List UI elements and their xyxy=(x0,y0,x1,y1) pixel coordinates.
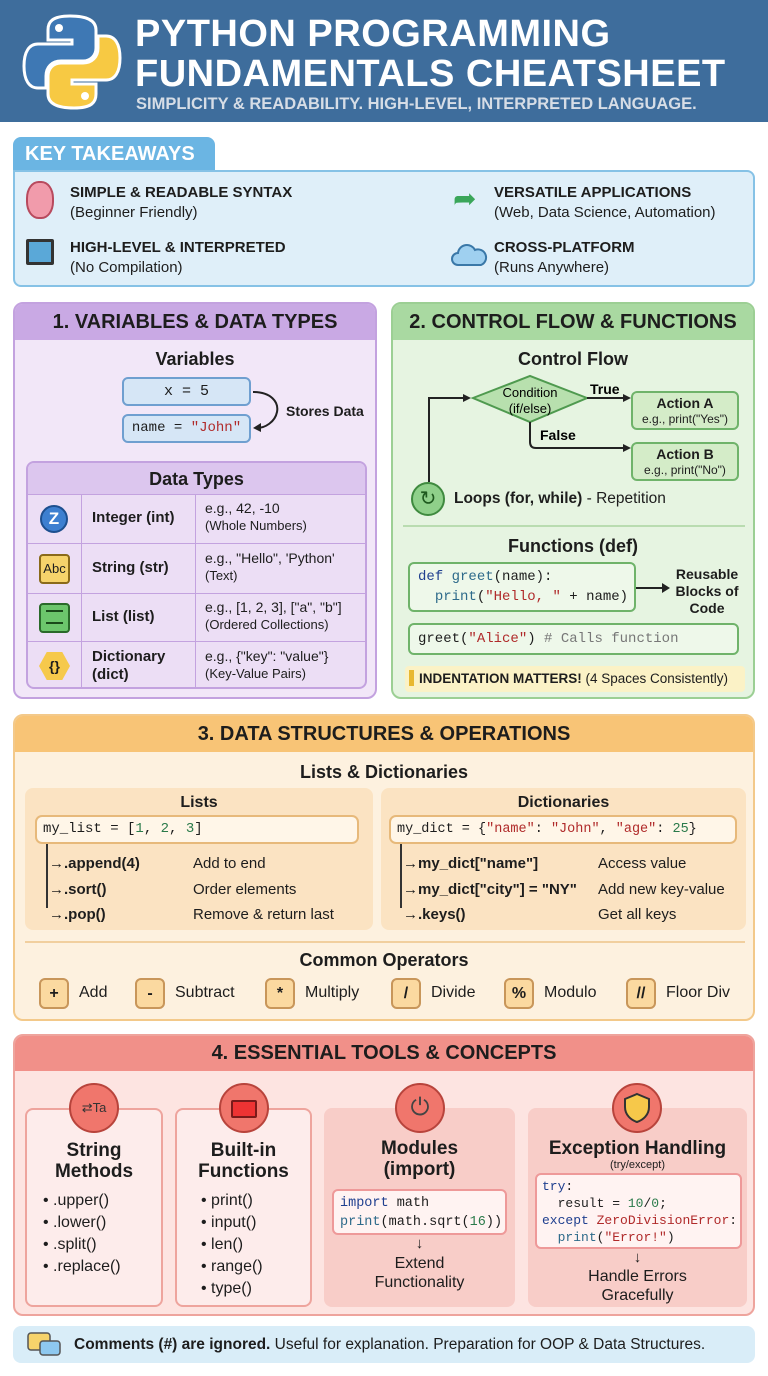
icon: plug: ⏻ xyxy=(410,1094,429,1121)
text: cross platform: (Runs Anywhere) xyxy=(494,259,609,276)
operators row: Modulo xyxy=(544,984,596,1001)
subheading: variables: Variables xyxy=(155,349,235,369)
text: cross platform: CROSS-PLATFORM xyxy=(494,239,635,256)
code: name = John: name = "John" xyxy=(132,420,241,436)
panel: key takeaways xyxy=(13,137,755,287)
title: PYTHON PROGRAMMING xyxy=(135,13,611,55)
code: x = 5 xyxy=(122,377,251,406)
card: string methods: String xyxy=(67,1140,121,1161)
icon: string methods xyxy=(69,1083,119,1133)
table: data types xyxy=(26,461,367,689)
card: modules: ↓ xyxy=(416,1235,423,1252)
operators row: + xyxy=(49,985,59,1002)
icon: speech bubbles xyxy=(27,1332,61,1356)
flowchart: control flow: False xyxy=(540,427,576,443)
card: string methods: • .upper() xyxy=(43,1192,109,1209)
box: action A: Action A xyxy=(656,395,714,411)
subpanel: lists xyxy=(25,788,373,930)
subpanel: lists: Lists xyxy=(180,794,218,811)
flowchart: control flow: True xyxy=(590,381,620,397)
row: integer: Z xyxy=(49,509,59,528)
card: exception handling: Gracefully xyxy=(601,1287,674,1304)
box: action B xyxy=(631,442,739,481)
row: dictionary: Dictionary xyxy=(92,648,165,665)
card: exception handling xyxy=(528,1108,747,1307)
text: reusable blocks: Reusable Blocks of Code xyxy=(675,566,738,616)
subpanel: lists: Order elements xyxy=(193,880,296,898)
row: integer xyxy=(40,500,307,533)
card: string methods: • .lower() xyxy=(43,1214,106,1231)
card: string methods: Methods xyxy=(55,1161,133,1182)
flowchart: control flow: (if/else) xyxy=(509,401,551,416)
panel: 4 essential tools & concepts xyxy=(13,1034,755,1316)
operators row: Subtract xyxy=(175,984,235,1001)
title xyxy=(135,13,726,95)
operators row: * xyxy=(277,985,283,1002)
row: string: (Text) xyxy=(205,568,238,583)
row: integer: (Whole Numbers) xyxy=(205,518,307,533)
panel: 1 variables & data types xyxy=(13,302,377,699)
subpanel: dictionaries: →my_dict["city"] = "NY" xyxy=(403,880,577,898)
card: built-in functions: Built-in xyxy=(211,1140,276,1161)
subtitle: SIMPLICITY & READABILITY. HIGH-LEVEL, INTERPRETED LANGUAGE. xyxy=(136,95,697,113)
card: built-in functions: • len() xyxy=(201,1236,243,1253)
text: footer: Comments (#) are ignored. Useful for explanation. Preparation for OOP & Data Structures. xyxy=(74,1336,705,1353)
card: modules: Functionality xyxy=(375,1274,464,1291)
heading: section 2: 2. CONTROL FLOW & FUNCTIONS xyxy=(409,311,737,333)
text: simple syntax: SIMPLE & READABLE SYNTAX xyxy=(70,184,292,201)
subpanel: dictionaries xyxy=(381,788,746,930)
card: modules: import math xyxy=(340,1196,429,1211)
row: list: e.g., [1, 2, 3], ["a", "b"] xyxy=(205,599,342,615)
icon: monitor xyxy=(26,239,54,265)
heading: section 4: 4. ESSENTIAL TOOLS & CONCEPTS xyxy=(212,1042,556,1064)
row: integer: Integer (int) xyxy=(92,509,174,526)
card: exception handling: (try/except) xyxy=(610,1159,665,1171)
box: action A xyxy=(631,391,739,430)
header banner xyxy=(0,0,768,122)
row: list xyxy=(39,599,342,633)
card: exception handling: print("Error!") xyxy=(558,1230,675,1245)
code: def greet: print("Hello, " + name) xyxy=(435,589,628,605)
note: indentation matters xyxy=(405,666,745,692)
subheading: lists & dictionaries: Lists & Dictionaries xyxy=(300,762,468,782)
card: built-in functions: • input() xyxy=(201,1214,256,1231)
subpanel: lists: Add to end xyxy=(193,855,266,872)
icon: arrow: ➦ xyxy=(453,183,476,214)
icon: loop xyxy=(411,482,445,516)
icon: python logo xyxy=(22,14,122,110)
text: high level xyxy=(70,239,286,276)
heading: section 1: 1. VARIABLES & DATA TYPES xyxy=(53,311,337,333)
icon: shield xyxy=(612,1083,662,1133)
text: simple syntax: (Beginner Friendly) xyxy=(70,204,198,221)
text: cross platform xyxy=(494,239,635,276)
code: def greet xyxy=(408,562,636,612)
text: simple syntax xyxy=(70,184,292,221)
row: dictionary xyxy=(39,648,328,683)
row: dictionary: {} xyxy=(49,658,60,674)
heading: section 3: 3. DATA STRUCTURES & OPERATIONS xyxy=(198,723,570,745)
subheading: common operators: Common Operators xyxy=(299,950,469,970)
flowchart: control flow xyxy=(428,374,631,482)
subpanel: dictionaries: Access value xyxy=(598,855,686,872)
subpanel: lists: →.pop() xyxy=(49,906,106,923)
panel: 2 control flow & functions xyxy=(391,302,755,699)
row: dictionary: e.g., {"key": "value"} xyxy=(205,648,328,664)
operators row: / xyxy=(404,985,408,1002)
row: dictionary: (dict) xyxy=(92,666,129,683)
text: versatile: (Web, Data Science, Automation) xyxy=(494,204,716,221)
icon: cloud xyxy=(451,244,488,266)
text: high level: (No Compilation) xyxy=(70,259,183,276)
text: versatile: VERSATILE APPLICATIONS xyxy=(494,184,691,201)
heading: section 2 xyxy=(393,304,753,340)
box: action B: e.g., print("No") xyxy=(644,463,726,477)
arrow: stores data xyxy=(253,391,278,432)
icon: plug xyxy=(395,1083,445,1133)
icon: toolbox xyxy=(219,1083,269,1133)
row: string xyxy=(39,550,335,584)
code: greet call xyxy=(408,623,739,655)
card: built-in functions xyxy=(175,1108,312,1307)
row: integer: e.g., 42, -10 xyxy=(205,500,280,516)
label: stores data: Stores Data xyxy=(286,403,364,419)
card: modules: print(math.sqrt(16)) xyxy=(340,1215,502,1230)
operators row: - xyxy=(147,985,153,1002)
note: indentation matters: INDENTATION MATTERS! (4 Spaces Consistently) xyxy=(419,671,728,686)
operators row: Multiply xyxy=(305,984,359,1001)
card: built-in functions: • print() xyxy=(201,1192,253,1209)
card: exception handling: Handle Errors xyxy=(588,1268,687,1285)
row: string: e.g., "Hello", 'Python' xyxy=(205,550,335,566)
heading: key takeaways tab: KEY TAKEAWAYS xyxy=(25,143,195,165)
row: string: Abc xyxy=(43,561,66,576)
card: exception handling: except ZeroDivisionError: xyxy=(542,1213,737,1228)
operators row: Divide xyxy=(431,984,475,1001)
icon: brain xyxy=(26,181,54,219)
code: x = 5: x = 5 xyxy=(164,383,209,400)
heading: section 3 xyxy=(15,716,753,752)
text: versatile xyxy=(494,184,716,221)
heading: section 4 xyxy=(15,1036,753,1071)
card: built-in functions: • type() xyxy=(201,1280,252,1297)
card: string methods xyxy=(25,1108,163,1307)
code: greet call: greet("Alice") # Calls function xyxy=(418,631,678,647)
card: string methods: • .split() xyxy=(43,1236,97,1253)
card: exception handling: result = 10/0; xyxy=(558,1196,667,1211)
subheading: control flow: Control Flow xyxy=(518,349,628,369)
card: exception handling: ↓ xyxy=(634,1249,641,1266)
box: action B: Action B xyxy=(656,446,714,462)
subpanel: lists: →.append(4) xyxy=(49,855,140,872)
code: def greet: def greet(name): xyxy=(418,569,552,585)
row: dictionary: (Key-Value Pairs) xyxy=(205,666,306,681)
code: name = John xyxy=(122,414,251,443)
subpanel: dictionaries: →my_dict["name"] xyxy=(403,855,538,872)
text: loops: Loops (for, while) - Repetition xyxy=(454,490,666,507)
subpanel: lists: my_list = [1, 2, 3] xyxy=(43,821,203,837)
operators row: // xyxy=(637,985,645,1002)
card: string methods: • .replace() xyxy=(43,1258,121,1275)
operators row xyxy=(39,978,730,1009)
card: built-in functions: • range() xyxy=(201,1258,263,1275)
card: modules xyxy=(324,1108,515,1307)
heading: key takeaways tab xyxy=(13,137,215,173)
subpanel: dictionaries: my_dict = {"name": "John", "age": 25} xyxy=(397,822,697,837)
operators row: Floor Div xyxy=(666,984,730,1001)
row: list: List (list) xyxy=(92,608,154,625)
subheading: functions: Functions (def) xyxy=(508,536,638,556)
footer note xyxy=(13,1326,755,1363)
text: high level: HIGH-LEVEL & INTERPRETED xyxy=(70,239,286,256)
icon: string methods: ⇄Ta xyxy=(82,1100,106,1115)
operators row: % xyxy=(512,985,526,1002)
subpanel: dictionaries: Get all keys xyxy=(598,906,676,923)
card: built-in functions: Functions xyxy=(198,1161,289,1182)
subpanel: dictionaries: Add new key-value xyxy=(598,880,725,898)
subpanel: dictionaries: Dictionaries xyxy=(518,794,609,811)
title: FUNDAMENTALS CHEATSHEET xyxy=(135,53,726,95)
row: list: (Ordered Collections) xyxy=(205,617,329,632)
card: exception handling: try: xyxy=(542,1179,573,1194)
icon: loop: ↻ xyxy=(420,488,436,510)
table: data types: Data Types xyxy=(149,469,244,489)
panel: 3 data structures & operations xyxy=(13,714,755,1021)
arrow: to reusable xyxy=(636,583,670,593)
heading: section 1 xyxy=(15,304,375,340)
subpanel: lists: Remove & return last xyxy=(193,906,334,923)
card: modules: (import) xyxy=(384,1159,455,1180)
row: string: String (str) xyxy=(92,559,169,576)
subpanel: dictionaries: →.keys() xyxy=(403,906,466,923)
card: modules: Extend xyxy=(395,1255,444,1272)
card: modules: Modules xyxy=(381,1138,458,1159)
card: exception handling: Exception Handling xyxy=(549,1138,726,1159)
box: action A: e.g., print("Yes") xyxy=(642,412,728,426)
flowchart: control flow: Condition xyxy=(503,385,557,400)
subpanel: lists: →.sort() xyxy=(49,880,106,898)
operators row: Add xyxy=(79,984,107,1001)
